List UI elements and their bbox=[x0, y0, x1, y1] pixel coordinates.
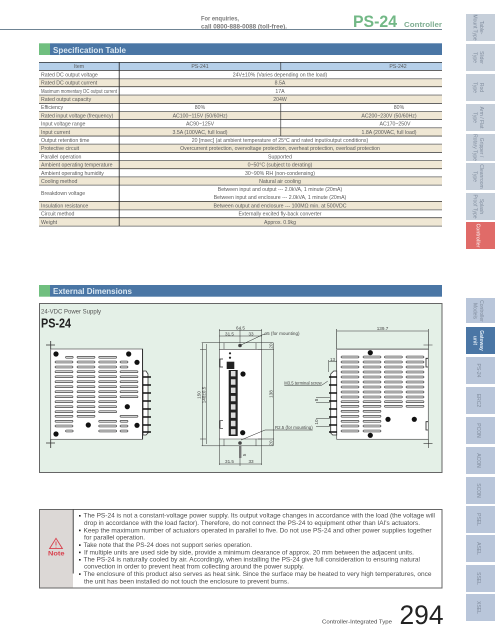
note text: Take note that the PS-24 does not support series operation. bbox=[84, 543, 252, 549]
drawing: front view with dimensions: 5 bbox=[242, 453, 247, 456]
panel: external dimensions bbox=[40, 304, 442, 472]
drawing: front view with dimensions: 150 bbox=[196, 391, 202, 399]
specification table bbox=[39, 62, 442, 227]
specification table: Ambient operating temperature bbox=[41, 163, 113, 169]
specification table: 24V±10% (Varies depending on the load) bbox=[233, 72, 327, 78]
specification table: Rated DC output current bbox=[41, 81, 98, 87]
heading: Specification Table bbox=[39, 43, 442, 55]
specification table: Between input and output --- 2.0kVA, 1 minute (20mA) bbox=[218, 187, 343, 193]
drawing: left side view bbox=[46, 341, 151, 448]
specification table: Efficiency bbox=[41, 105, 64, 111]
note text: If multiple units are used side by side, provide a minimum clearance of approx. 20 mm between the adjacent units. bbox=[84, 550, 414, 556]
note text: The PS-24 is not a constant-voltage power supply. Its output voltage changes in accordance with the load (the voltage will bbox=[84, 514, 435, 520]
specification table: Item bbox=[74, 64, 84, 70]
specification table: Breakdown voltage bbox=[41, 191, 85, 197]
specification table: 30~90% RH (non-condensing) bbox=[245, 171, 315, 177]
panel: note bbox=[40, 510, 442, 588]
header: enquiries and product title: call 0800-888-0088 (toll-free). bbox=[201, 24, 287, 30]
heading: Specification Table: Specification Table bbox=[53, 46, 127, 55]
specification table: Cooling method bbox=[41, 179, 77, 185]
sidebar navigation tabs: Rod bbox=[478, 83, 484, 92]
specification table: Approx. 0.9kg bbox=[264, 220, 296, 226]
drawing: right side view: 8 bbox=[314, 398, 319, 401]
sidebar navigation tabs: Rotary Type bbox=[472, 134, 478, 161]
specification table: Parallel operation bbox=[41, 154, 81, 160]
specification table: Protective circuit bbox=[41, 146, 80, 152]
specification table: Externally excited fly-back converter bbox=[238, 212, 322, 218]
specification table: Natural air cooling bbox=[259, 179, 301, 185]
specification table: Supported bbox=[268, 154, 292, 160]
drawing: right side view: 10 bbox=[314, 419, 319, 425]
panel title: 24-VDC Power Supply PS-24 bbox=[41, 310, 101, 331]
note text: the unit has been installed do not touch the enclosure to prevent burns. bbox=[84, 579, 289, 585]
icon: warning triangle bbox=[50, 538, 62, 549]
specification table: Ambient operating humidity bbox=[41, 171, 104, 177]
drawing: front view with dimensions: 31.5 bbox=[225, 459, 234, 464]
specification table: Input current bbox=[41, 130, 71, 136]
header: enquiries and product title: PS-24 bbox=[353, 12, 398, 31]
drawing: front view with dimensions: 20 bbox=[268, 343, 274, 349]
heading: External Dimensions: External Dimensions bbox=[53, 287, 133, 296]
specification table: Rated DC output voltage bbox=[41, 72, 98, 78]
drawing: front view with dimensions: 33 bbox=[248, 459, 254, 464]
heading: External Dimensions bbox=[39, 285, 442, 297]
sidebar navigation tabs: ERC2 bbox=[475, 394, 481, 407]
specification table: Rated output capacity bbox=[41, 97, 92, 103]
note text: Keep the maximum number of actuators operated in parallel to five. Do not use PS-24 and other power supplies together bbox=[84, 528, 432, 534]
sidebar navigation tabs: Gateway bbox=[478, 330, 484, 351]
note text: for parallel operation. bbox=[84, 536, 145, 542]
specification table: Output retention time bbox=[41, 138, 90, 144]
note label: Note bbox=[48, 550, 65, 557]
specification table: AC170~250V bbox=[379, 122, 411, 128]
specification table: Insulation resistance bbox=[41, 203, 88, 209]
header: enquiries and product title bbox=[0, 12, 442, 31]
sidebar navigation tabs: Type bbox=[472, 52, 478, 63]
drawing: right side view: 13 bbox=[330, 357, 335, 362]
specification table: Rated input voltage (frequency) bbox=[41, 113, 114, 119]
note text: The PS-24 is naturally cooled by air. Accordingly, when installing the PS-24 give full consideration to ensuring natural bbox=[84, 558, 420, 564]
specification table: Weight bbox=[41, 220, 58, 226]
sidebar navigation tabs: Splash bbox=[478, 199, 484, 214]
specification table: Overcurrent protection, overvoltage protection, overheat protection, overload protection bbox=[180, 146, 380, 152]
sidebar navigation tabs: Type bbox=[472, 112, 478, 123]
note text bbox=[79, 514, 435, 585]
drawing: front view with dimensions bbox=[196, 326, 328, 466]
specification table: 20 [msec] (at ambient temperature of 25°C and rated input/output conditions) bbox=[192, 138, 369, 144]
sidebar navigation tabs: Mount Type bbox=[472, 14, 478, 41]
sidebar navigation tabs: ASEL bbox=[475, 542, 481, 555]
sidebar navigation tabs: Gripper / bbox=[478, 138, 484, 158]
sidebar navigation tabs: SSEL bbox=[475, 572, 481, 585]
header: enquiries and product title: Controller bbox=[404, 20, 442, 29]
specification table: Between output and enclosure --- 100MΩ min. at 500VDC bbox=[213, 203, 347, 209]
sidebar navigation tabs: Controller bbox=[478, 300, 484, 322]
specification table: Maximum momentary DC output current bbox=[41, 89, 117, 95]
specification table: Input voltage range bbox=[41, 122, 86, 128]
specification table: Between input and enclosure --- 2.0kVA, 1 minute (20mA) bbox=[214, 195, 347, 201]
note text: drop in accordance with the load factor). Therefore, do not connect the PS-24 to equipment other than IAI's actuators. bbox=[84, 521, 420, 527]
sidebar navigation tabs: Type bbox=[472, 82, 478, 93]
specification table: AC200~230V (50/60Hz) bbox=[361, 113, 417, 119]
sidebar navigation tabs: Table- bbox=[478, 21, 484, 35]
sidebar navigation tabs: PS-24 bbox=[475, 364, 481, 378]
specification table: AC90~125V bbox=[186, 122, 215, 128]
callout lines bbox=[240, 335, 328, 440]
sidebar navigation tabs: unit bbox=[472, 336, 478, 345]
sidebar navigation tabs: Slider bbox=[478, 51, 484, 64]
drawing: front view with dimensions: 138 bbox=[268, 390, 274, 398]
specification table: 1.8A (200VAC, full load) bbox=[362, 130, 417, 136]
drawing: right side view: 139.7 bbox=[377, 326, 389, 331]
sidebar navigation tabs: Type bbox=[472, 171, 478, 182]
sidebar navigation tabs: Models bbox=[472, 303, 478, 320]
sidebar navigation tabs: Controller bbox=[474, 224, 480, 247]
drawing: right side view bbox=[314, 326, 432, 448]
specification table: 17A bbox=[275, 89, 285, 95]
specification table: 80% bbox=[394, 105, 405, 111]
footer: page type and number bbox=[322, 600, 444, 630]
sidebar navigation tabs: PCON bbox=[475, 423, 481, 438]
sidebar navigation tabs: Cleanroom bbox=[478, 164, 484, 189]
specification table: 8.5A bbox=[275, 81, 286, 87]
drawing: front view with dimensions: M3.5 terminal screw bbox=[284, 380, 322, 385]
footer: page type and number: 294 bbox=[400, 600, 444, 630]
drawing: front view with dimensions: 20 bbox=[268, 440, 274, 446]
sidebar navigation tabs bbox=[466, 14, 495, 621]
sidebar navigation tabs: SCON bbox=[475, 483, 481, 498]
drawing: front view with dimensions: ø5 (for mounting) bbox=[264, 331, 300, 336]
sidebar navigation tabs: XSEL bbox=[475, 601, 481, 614]
panel title: 24-VDC Power Supply PS-24: PS-24 bbox=[41, 317, 71, 331]
drawing: front view with dimensions: 31.5 bbox=[225, 331, 234, 336]
specification table: Circuit method bbox=[41, 212, 75, 218]
sidebar navigation tabs: Arm / Flat bbox=[478, 107, 484, 129]
sidebar navigation tabs: PSEL bbox=[475, 513, 481, 526]
note text: convection in order to prevent heat from collecting around the power supply. bbox=[84, 565, 304, 571]
drawing: front view with dimensions: 148±0.5 bbox=[202, 386, 206, 403]
sidebar navigation tabs: ACON bbox=[475, 453, 481, 468]
drawing: front view with dimensions: 64.5 bbox=[236, 326, 245, 331]
specification table: PS-241 bbox=[191, 64, 209, 70]
header: enquiries and product title: For enquiries, bbox=[201, 16, 239, 22]
specification table: PS-242 bbox=[389, 64, 407, 70]
specification table: AC100~115V (50/60Hz) bbox=[173, 113, 228, 119]
note text: The enclosure of this product also serves as heat sink. Since the surface may be heated to very high temperatures, once bbox=[84, 572, 432, 578]
footer: page type and number: Controller-Integrated Type bbox=[322, 620, 392, 626]
specification table: 204W bbox=[273, 97, 287, 103]
specification table: 0~50°C (subject to derating) bbox=[248, 163, 313, 169]
specification table: 80% bbox=[195, 105, 206, 111]
sidebar navigation tabs: Proof Type bbox=[472, 194, 478, 219]
drawing: front view with dimensions: 33 bbox=[248, 331, 254, 336]
specification table: 3.5A (100VAC, full load) bbox=[173, 130, 228, 136]
panel title: 24-VDC Power Supply PS-24: 24-VDC Power Supply bbox=[41, 310, 101, 316]
terminal block bbox=[229, 370, 238, 436]
drawing: front view with dimensions: R2.5 (for mounting) bbox=[275, 425, 313, 430]
